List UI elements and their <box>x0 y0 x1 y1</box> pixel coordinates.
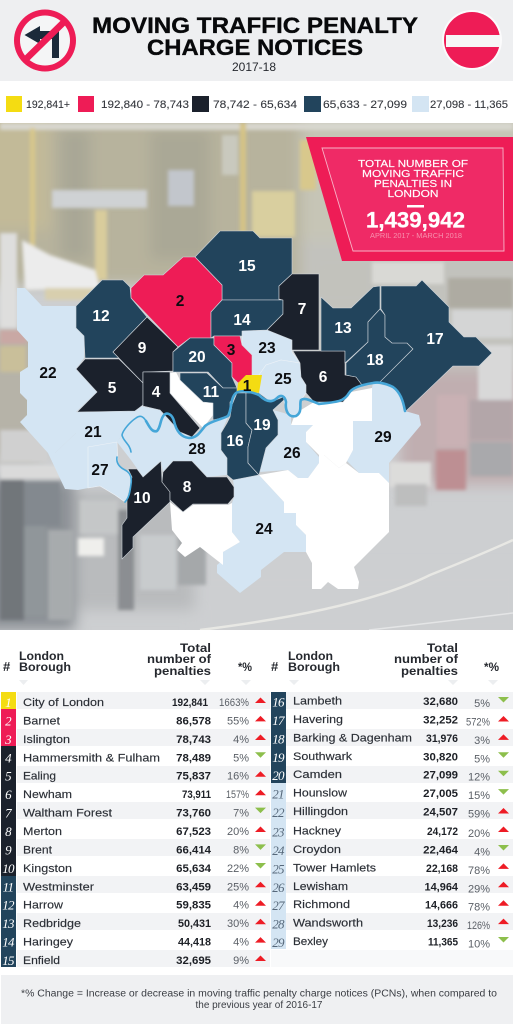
row 25: 78% <box>468 865 490 877</box>
row 3 <box>4 732 266 747</box>
row 10: 65,634 <box>176 863 212 875</box>
row 4 <box>5 750 266 765</box>
row 11: Westminster <box>23 881 94 893</box>
row 20: Camden <box>293 769 342 781</box>
callout number: 1,439,942 <box>366 208 465 232</box>
map numbers: 7 <box>298 301 306 318</box>
white area: Bromley <box>259 455 389 589</box>
row 16: 5% <box>474 698 490 710</box>
row 17: 572% <box>466 716 490 728</box>
row 9: Brent <box>23 844 53 856</box>
row 17: Havering <box>293 714 343 726</box>
legend item: 27,098 - 11,365: 27,098 - 11,365 <box>430 99 508 111</box>
row 22: 59% <box>468 808 490 820</box>
row 18: Barking & Dagenham <box>293 732 412 744</box>
row 13: 50,431 <box>178 918 212 930</box>
table header: right: number of <box>394 652 459 666</box>
table: right column <box>271 641 513 967</box>
row 22: 22 <box>272 805 285 820</box>
row 11: 11 <box>3 879 14 894</box>
legend item: 27,098 - 11,365 <box>412 96 508 112</box>
borough 21 Hounslow <box>48 406 143 490</box>
map of London boroughs <box>17 231 492 593</box>
row 17: 32,252 <box>423 714 458 726</box>
row 4: 4 <box>5 750 12 765</box>
row 3: Islington <box>23 734 70 746</box>
map numbers: 22 <box>39 365 57 382</box>
borough 19 Southwark <box>246 393 284 475</box>
table header: left <box>3 641 252 685</box>
row 10 <box>2 861 266 876</box>
row 4: 78,489 <box>176 752 211 764</box>
row 9: 8% <box>233 844 249 856</box>
row 12: 4% <box>233 900 249 912</box>
legend item: 192,840 - 78,743: 192,840 - 78,743 <box>101 99 189 111</box>
row 13: 30% <box>227 918 249 930</box>
callout: total penalties <box>306 137 513 261</box>
legend item: 78,742 - 65,634: 78,742 - 65,634 <box>213 99 297 111</box>
map numbers: 12 <box>92 308 110 325</box>
row 3: 4% <box>233 734 249 746</box>
white area: Greenwich <box>291 388 372 468</box>
row 13: Redbridge <box>23 918 81 930</box>
map numbers: 13 <box>334 320 352 337</box>
map numbers: 23 <box>258 340 276 357</box>
legend item: 192,840 - 78,743 <box>78 96 189 112</box>
row 16: 32,680 <box>423 696 458 708</box>
borough 6 Newham <box>293 351 362 402</box>
borough 25 Tower Hamlets <box>259 360 306 417</box>
row 9 <box>5 842 266 857</box>
row 24: 4% <box>474 846 490 858</box>
borough 13 Redbridge <box>321 286 380 363</box>
table header: left: Borough <box>19 660 71 674</box>
row 21: 15% <box>468 790 490 802</box>
row 26: 26 <box>272 880 285 895</box>
table header: right: Borough <box>288 660 340 674</box>
row 24: 22,464 <box>423 844 459 856</box>
table header: left: # <box>3 659 11 674</box>
row 1 <box>5 695 266 710</box>
row 23: 20% <box>468 828 490 840</box>
map numbers: 11 <box>203 384 220 401</box>
callout heading: LONDON <box>388 189 438 200</box>
row 10: Kingston <box>23 863 72 875</box>
row 2: 2 <box>5 713 12 728</box>
row 20 <box>272 768 509 784</box>
borough 14 Haringey <box>211 300 283 338</box>
legend item: 192,841+ <box>6 96 70 112</box>
row 28 <box>272 917 509 932</box>
row 16: Lambeth <box>293 696 342 708</box>
row 25: Tower Hamlets <box>293 862 376 874</box>
title: MOVING TRAFFIC PENALTY <box>92 13 418 38</box>
borough 29 Bexley <box>346 383 421 483</box>
legend item: 65,633 - 27,099: 65,633 - 27,099 <box>323 99 407 111</box>
row 5: 16% <box>227 771 249 783</box>
row 11: 25% <box>227 881 249 893</box>
table header: right: *% <box>484 660 499 674</box>
row 2: 55% <box>227 715 249 727</box>
callout heading <box>358 159 468 200</box>
row 15: 15 <box>2 953 15 968</box>
icon: no entry sign <box>442 10 502 70</box>
row 29: 29 <box>272 935 285 950</box>
title: CHARGE NOTICES <box>147 35 363 60</box>
borough 10 Kingston <box>122 461 170 559</box>
row 9: 66,414 <box>176 844 212 856</box>
row 27: 14,666 <box>425 900 458 912</box>
row 3: 78,743 <box>176 734 211 746</box>
borough 5 Ealing <box>76 359 143 412</box>
row 3: 3 <box>4 732 12 747</box>
row 21: 21 <box>272 787 284 802</box>
borough 16 Lambeth <box>221 393 259 480</box>
table header: right: # <box>271 659 279 674</box>
row 26: Lewisham <box>293 881 348 893</box>
row 7: 73,760 <box>176 808 211 820</box>
row 17: 17 <box>272 713 285 728</box>
row 27: 78% <box>468 902 490 914</box>
borough 26 Lewisham <box>259 410 319 478</box>
header band <box>0 0 513 81</box>
map numbers <box>39 258 444 538</box>
row stripes: left <box>17 692 270 967</box>
row 13: 13 <box>2 916 15 931</box>
row 23: 24,172 <box>427 826 458 838</box>
row 15: 9% <box>233 955 249 967</box>
row 5 <box>5 769 266 784</box>
row 18: 18 <box>272 731 285 746</box>
table header: right <box>271 641 499 685</box>
row 7: 7 <box>5 806 12 821</box>
icon: no left turn sign <box>14 10 76 72</box>
row 1: 1663% <box>219 697 249 709</box>
row 18: 3% <box>474 735 490 747</box>
row 19: 30,820 <box>423 751 458 763</box>
row 5: 75,837 <box>176 771 211 783</box>
row 28: 13,236 <box>427 918 458 930</box>
map numbers: 17 <box>426 331 444 348</box>
row 14: Haringey <box>23 937 73 949</box>
row 10: 22% <box>227 863 249 875</box>
table header: left: London <box>19 649 64 663</box>
map numbers: 14 <box>233 312 251 329</box>
row 23: Hackney <box>293 826 341 838</box>
row 28: 126% <box>467 920 490 932</box>
row 7: Waltham Forest <box>23 808 113 820</box>
table header: right: penalties <box>401 664 458 678</box>
map numbers: 15 <box>238 258 256 275</box>
row 22: 24,507 <box>423 806 458 818</box>
table header: right: London <box>288 649 333 663</box>
row 25 <box>272 861 509 877</box>
row 6: 157% <box>226 789 249 801</box>
callout heading: TOTAL NUMBER OF <box>358 159 468 170</box>
row 12: Harrow <box>23 900 64 912</box>
row stripes: right <box>271 692 513 967</box>
row 6: 6 <box>5 787 12 802</box>
borough 15 Enfield <box>195 231 292 300</box>
map numbers: 6 <box>319 369 328 386</box>
borough 23 Hackney <box>242 330 300 375</box>
row 15 <box>2 953 266 968</box>
row 14: 4% <box>233 937 249 949</box>
row 17 <box>272 713 509 728</box>
row 6 <box>5 787 266 802</box>
row 15: 32,695 <box>176 955 212 967</box>
row 8: 20% <box>227 826 249 838</box>
white area: Sutton <box>170 502 240 565</box>
table header: right: Total <box>427 641 458 655</box>
footer note <box>1 975 513 1024</box>
row 12: 12 <box>2 898 15 913</box>
legend <box>6 96 508 112</box>
row 14 <box>2 935 266 950</box>
row 27: Richmond <box>293 899 350 911</box>
row 28: 28 <box>272 917 285 932</box>
row 15: Enfield <box>23 955 60 967</box>
map numbers: 16 <box>226 433 244 450</box>
row 8: 67,523 <box>176 826 211 838</box>
row 21: Hounslow <box>293 788 348 800</box>
row 29: 10% <box>468 938 490 950</box>
row 19: Southwark <box>293 751 352 763</box>
row 26: 29% <box>468 883 490 895</box>
row 28: Wandsworth <box>293 918 363 930</box>
background photo: traffic queue <box>0 110 513 640</box>
row 1: 1 <box>5 695 11 710</box>
borough 22 Hillingdon <box>17 288 97 453</box>
row 29 <box>272 935 509 950</box>
row 6: Newham <box>23 789 72 801</box>
map numbers: 27 <box>91 462 109 479</box>
row 13 <box>2 916 266 931</box>
row 2 <box>5 713 266 728</box>
row 24 <box>272 843 509 858</box>
map numbers: 26 <box>283 445 301 462</box>
row 8: 8 <box>5 824 12 839</box>
map numbers: 28 <box>188 441 206 458</box>
row 2: Barnet <box>23 715 61 727</box>
map numbers: 5 <box>108 380 117 397</box>
row 21: 27,005 <box>423 788 459 800</box>
map numbers: 1 <box>243 378 252 395</box>
row 19 <box>272 750 509 765</box>
callout heading: PENALTIES IN <box>374 179 452 190</box>
row 1: City of London <box>23 697 104 709</box>
row 7: 7% <box>233 808 249 820</box>
row 22: Hillingdon <box>293 806 348 818</box>
row 20: 27,099 <box>423 770 458 782</box>
borough 1 City of London <box>237 375 262 393</box>
row 1: 192,841 <box>172 697 209 709</box>
borough 11 Westminster <box>180 373 237 420</box>
row 5: Ealing <box>23 771 56 783</box>
borough 3 Islington <box>214 336 252 383</box>
row 23: 23 <box>272 824 285 840</box>
rank colour bar: left <box>1 692 16 967</box>
row 14: 44,418 <box>178 937 211 949</box>
row 8: Merton <box>23 826 62 838</box>
borough 2 Barnet <box>131 257 222 347</box>
table header: left: *% <box>238 660 252 674</box>
row 4: 5% <box>233 752 249 764</box>
row 11: 63,459 <box>176 881 211 893</box>
table header: left: Total <box>180 641 211 655</box>
row 24: Croydon <box>293 844 341 856</box>
row 4: Hammersmith & Fulham <box>23 752 160 764</box>
row 6: 73,911 <box>182 789 212 801</box>
borough 4 Hammersmith and Fulham <box>143 372 200 437</box>
borough 18 Barking and Dagenham <box>346 309 413 385</box>
map numbers: 24 <box>255 521 273 538</box>
title <box>92 13 418 60</box>
map numbers: 25 <box>274 371 292 388</box>
row 16 <box>272 694 509 710</box>
white area: Kensington and Chelsea <box>170 372 213 428</box>
borough 28 Wandsworth <box>117 406 232 477</box>
row 29: Bexley <box>293 936 328 948</box>
row 27: 27 <box>272 898 285 913</box>
row 20: 20 <box>272 768 285 783</box>
map numbers: 19 <box>253 417 271 434</box>
row 19: 19 <box>272 750 285 765</box>
borough 27 Richmond <box>88 442 132 502</box>
borough 20 Camden <box>173 338 237 388</box>
map numbers: 29 <box>374 429 392 446</box>
borough 8 Merton <box>162 461 234 512</box>
row 25: 22,168 <box>426 863 458 875</box>
map numbers: 18 <box>366 352 384 369</box>
map numbers: 4 <box>152 384 161 401</box>
footer note: the previous year of 2016-17 <box>196 1000 322 1011</box>
row 25: 25 <box>272 861 285 876</box>
row 16: 16 <box>272 694 285 710</box>
map numbers: 10 <box>133 490 151 507</box>
borough 7 Waltham Forest <box>267 274 319 350</box>
row 7 <box>5 806 266 821</box>
legend item: 192,841+: 192,841+ <box>26 99 70 111</box>
row 8 <box>5 824 266 839</box>
row 10: 10 <box>2 861 15 876</box>
borough 9 Brent <box>113 317 178 383</box>
row 27 <box>272 898 509 914</box>
row 20: 12% <box>468 772 490 784</box>
row 26: 14,964 <box>424 881 459 893</box>
row 9: 9 <box>5 842 12 857</box>
row 18 <box>272 731 509 747</box>
map numbers: 3 <box>227 342 236 359</box>
row 23 <box>272 824 509 840</box>
subtitle: year: 2017-18 <box>232 60 276 74</box>
row 12 <box>2 898 266 913</box>
row 18: 31,976 <box>426 733 458 745</box>
borough 17 Havering <box>379 280 492 411</box>
borough 12 Harrow <box>76 280 147 358</box>
callout date range: APRIL 2017 - MARCH 2018 <box>370 231 462 240</box>
table: left column <box>1 641 270 968</box>
row 2: 86,578 <box>176 715 211 727</box>
row 19: 5% <box>474 753 490 765</box>
map numbers: 9 <box>138 340 147 357</box>
row 5: 5 <box>5 769 12 784</box>
row 29: 11,365 <box>428 936 459 948</box>
map numbers: 20 <box>188 349 206 366</box>
map numbers: 2 <box>176 293 184 310</box>
row 26 <box>272 880 509 895</box>
row 14: 14 <box>2 935 15 950</box>
rank colour bar: right <box>271 692 286 949</box>
row 22 <box>272 805 509 820</box>
row 24: 24 <box>272 843 285 858</box>
row 11 <box>3 879 266 894</box>
borough 24 Croydon <box>217 475 306 593</box>
legend item: 65,633 - 27,099 <box>304 96 407 112</box>
callout heading: MOVING TRAFFIC <box>362 169 465 180</box>
row 12: 59,835 <box>176 900 212 912</box>
map numbers: 21 <box>84 424 102 441</box>
row 21 <box>272 787 509 802</box>
footer note: *% Change = Increase or decrease in moving traffic penalty charge notices (PCNs), when compared to <box>21 988 498 1000</box>
legend item: 78,742 - 65,634 <box>192 96 297 112</box>
table header: left: penalties <box>154 664 211 678</box>
map numbers: 8 <box>183 479 192 496</box>
river Thames <box>117 383 405 502</box>
table header: left: number of <box>147 652 212 666</box>
